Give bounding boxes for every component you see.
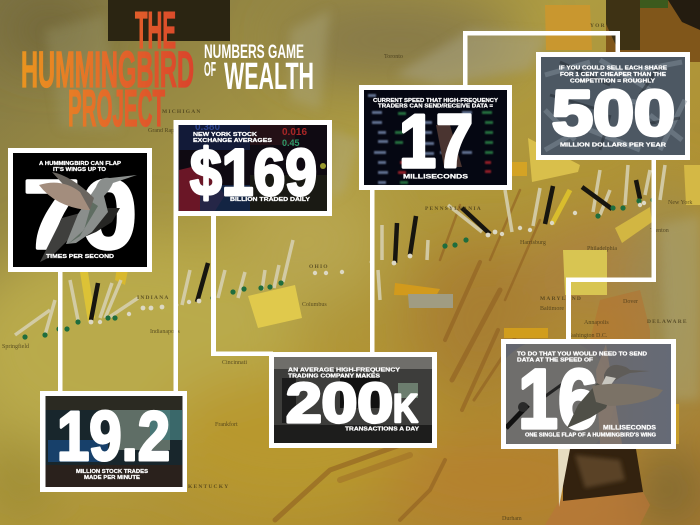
panel: 200k transactions: 200 <box>286 371 393 434</box>
panel: 200k transactions: AN AVERAGE HIGH-FREQUENCY <box>288 368 400 374</box>
panel: 200k transactions: TRANSACTIONS A DAY <box>345 426 419 432</box>
panel: 17 milliseconds <box>359 85 512 190</box>
panel: 16 milliseconds <box>501 339 676 449</box>
sticky notes <box>80 5 700 444</box>
panel: 19.2 million <box>40 391 187 492</box>
yellow flag <box>552 190 570 224</box>
place names: Trenton <box>650 228 669 234</box>
place names: PENNSYLVANIA <box>425 206 482 212</box>
place names: Springfield <box>2 343 29 350</box>
panel: 70 flaps: TIMES PER SECOND <box>46 254 114 260</box>
title: PROJECT <box>68 80 165 138</box>
panel: 16 milliseconds: DATA AT THE SPEED OF <box>517 358 594 364</box>
place names: Durham <box>502 516 522 522</box>
place names: Washington D.C. <box>566 333 608 339</box>
place names: Annapolis <box>584 320 609 326</box>
panel: 16 milliseconds: ONE SINGLE FLAP OF A HUMMINGBIRD'S WING <box>525 432 656 438</box>
orange coastal plain <box>590 290 650 340</box>
photo clipped at top of map <box>108 0 230 41</box>
landscape photo <box>606 0 700 62</box>
panel: 200k transactions <box>269 352 437 448</box>
icon: hummingbird <box>567 365 663 428</box>
subtitle: WEALTH <box>224 56 314 98</box>
panel: 500 million: MILLION DOLLARS PER YEAR <box>560 142 666 148</box>
panel: 19.2 million: 19.2 <box>57 397 170 475</box>
panel: 200k transactions: K <box>393 387 418 431</box>
panel: 70 flaps: A HUMMINGBIRD CAN FLAP <box>39 161 121 167</box>
place names: OHIO <box>309 264 329 270</box>
title: THE <box>135 2 176 60</box>
panel: 200k transactions: TRADING COMPANY MAKES <box>288 374 380 380</box>
subtitle: NUMBERS GAME <box>204 42 304 63</box>
subtitle <box>204 42 314 98</box>
panel: $169 billion: NEW YORK STOCK <box>193 132 257 138</box>
panel: $169 billion: 0.380 <box>195 122 220 133</box>
mountain ridges <box>275 190 540 520</box>
dark photo bottom right <box>563 449 643 501</box>
panel: $169 billion <box>174 120 332 216</box>
black flags <box>91 180 640 320</box>
panel: 17 milliseconds: TRADERS CAN SEND/RECEIVE DATA = <box>378 104 494 110</box>
place names: YOR <box>590 23 606 29</box>
place names: Toronto <box>384 54 403 60</box>
place names: Indianapolis <box>150 329 180 335</box>
panel: $169 billion: 0.016 <box>282 127 307 138</box>
place names: Philadelphia <box>587 246 617 252</box>
panel: 19.2 million: MILLION STOCK TRADES <box>76 469 148 475</box>
panel: 500 million <box>536 52 690 160</box>
place names: MICHIGAN <box>162 109 202 115</box>
panel: 500 million: COMPETITION = ROUGHLY <box>570 78 655 84</box>
text: HUMMINGBIRD <box>21 41 194 98</box>
pins <box>22 197 656 340</box>
panel: 500 million: IF YOU COULD SELL EACH SHARE <box>559 66 667 72</box>
place names: New York <box>668 200 692 206</box>
place names: KENTUCKY <box>188 484 229 490</box>
icon: hummingbird <box>39 172 137 262</box>
panel: 16 milliseconds: MILLISECONDS <box>603 424 657 432</box>
place names: INDIANA <box>137 295 170 301</box>
subtitle: OF <box>204 59 216 81</box>
place names: MARYLAND <box>540 296 582 302</box>
panel: 16 milliseconds: TO DO THAT YOU WOULD NEED TO SEND <box>517 352 647 358</box>
panel: 500 million: 500 <box>552 77 675 149</box>
panel: 19.2 million: MADE PER MINUTE <box>84 475 140 481</box>
panel: 16 milliseconds: 16 <box>518 352 598 446</box>
place names: Columbus <box>302 302 327 308</box>
panel: $169 billion: EXCHANGE AVERAGES <box>193 138 272 144</box>
panel: 70 flaps: 70 <box>23 160 137 269</box>
panel: 17 milliseconds: MILLISECONDS <box>403 174 469 180</box>
place names: Baltimore <box>540 306 564 312</box>
panel: $169 billion: $169 <box>190 135 317 209</box>
place names: Frankfort <box>215 421 238 428</box>
place names: Grand Rapids <box>148 128 182 134</box>
connector lines <box>58 31 656 392</box>
place names: Cincinnati <box>222 360 247 366</box>
panel: $169 billion: BILLION TRADED DAILY <box>230 197 310 203</box>
place names: DELAWARE <box>647 319 688 325</box>
panel: 17 milliseconds: CURRENT SPEED THAT HIGH-FREQUENCY <box>373 98 498 104</box>
place names: Dover <box>623 299 638 305</box>
panel: 70 flaps <box>8 148 152 272</box>
panel: 70 flaps: IT'S WINGS UP TO <box>53 167 107 173</box>
panel: 17 milliseconds: 17 <box>399 99 473 183</box>
place names: Harrisburg <box>520 240 546 246</box>
title <box>21 2 194 138</box>
paper flags <box>15 165 665 335</box>
panel: $169 billion: 0.45 <box>282 138 300 148</box>
panel: 500 million: FOR 1 CENT CHEAPER THAN THE <box>560 72 666 78</box>
